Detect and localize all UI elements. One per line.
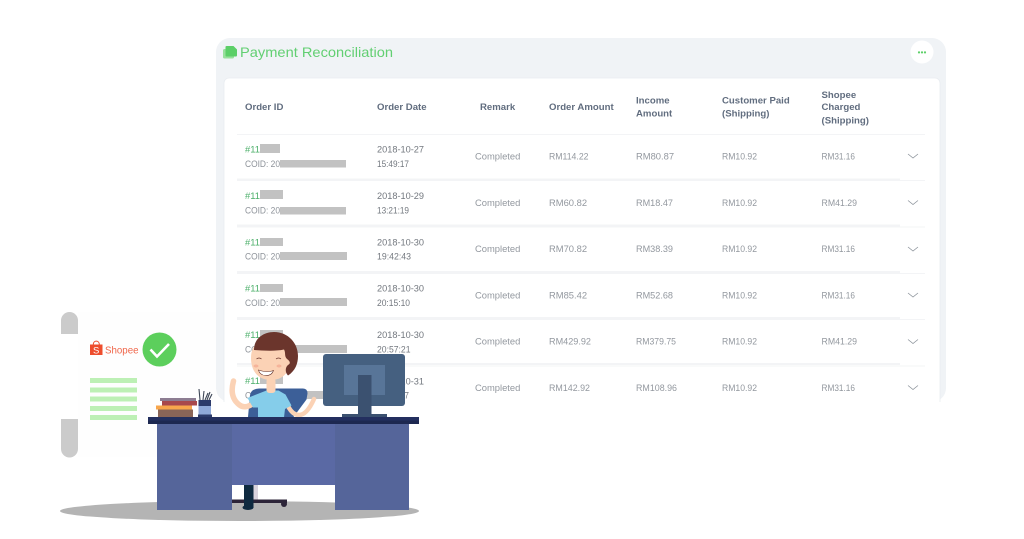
row: order 2018-10-30 20:15: Completed	[475, 290, 520, 300]
pen holder	[198, 389, 212, 417]
row: order 2018-10-27: Completed	[475, 150, 520, 162]
cheeks	[254, 364, 282, 368]
row: order 2018-10-30 20:57: RM429.92	[549, 336, 591, 346]
computer monitor	[323, 354, 405, 417]
office chair	[232, 388, 308, 510]
row: order 2018-10-27: 2018-10-27	[377, 144, 424, 154]
row: order 2018-10-30 20:15: RM10.92	[722, 290, 757, 300]
books stack	[156, 398, 197, 418]
row: order 2018-10-30 20:57: RM10.92	[722, 336, 757, 346]
row: order 2018-10-30 19:42: Completed	[475, 243, 520, 254]
row: order 2018-10-31: 21:00:07	[377, 390, 409, 400]
row: order 2018-10-30 20:57: 20:57:21	[377, 344, 410, 354]
torso	[248, 390, 292, 418]
table header row	[245, 90, 869, 126]
row: order 2018-10-30 19:42: 19:42:43	[377, 252, 411, 262]
row: order 2018-10-27: RM10.92	[722, 150, 757, 162]
row: order 2018-10-30 20:57: 2018-10-30	[377, 330, 424, 340]
table header row: Order Date	[377, 102, 427, 113]
row: order 2018-10-29: COID: 20	[245, 206, 280, 216]
table header row: Income	[636, 96, 670, 106]
row: order 2018-10-31: RM108.96	[636, 382, 677, 393]
row: order 2018-10-27: 15:49:17	[377, 159, 409, 169]
row: order 2018-10-30 20:15: RM85.42	[549, 290, 587, 300]
row: order 2018-10-30 20:57: #11	[245, 330, 260, 341]
row: order 2018-10-30 20:15: 2018-10-30	[377, 284, 424, 294]
left arm	[232, 381, 254, 407]
row: order 2018-10-30 20:15	[237, 271, 925, 308]
row: order 2018-10-29: RM18.47	[636, 197, 673, 208]
row: order 2018-10-30 20:15: #11	[245, 284, 260, 294]
row: order 2018-10-29: 2018-10-29	[377, 191, 424, 201]
icon: Shopee bag: S	[93, 346, 99, 356]
row: order 2018-10-29: #11	[245, 191, 260, 202]
row: order 2018-10-29: 13:21:19	[377, 206, 409, 216]
heading: Payment Reconciliation: Payment Reconciliation	[240, 44, 393, 60]
row: order 2018-10-31: COID: 20	[245, 390, 280, 400]
row: order 2018-10-27: COID: 20	[245, 159, 280, 169]
table header row: Customer Paid	[722, 96, 790, 106]
icon: more options button	[910, 40, 934, 64]
hair	[254, 332, 298, 376]
Shopee wordmark: Shopee	[105, 344, 139, 356]
table header row: Charged	[822, 102, 861, 113]
row: order 2018-10-30 19:42: 2018-10-30	[377, 238, 424, 248]
row: order 2018-10-27	[237, 134, 925, 169]
row: order 2018-10-30 20:15: RM52.68	[636, 290, 673, 300]
desk	[148, 417, 419, 510]
face	[251, 338, 290, 380]
row: order 2018-10-31: Completed	[475, 382, 520, 393]
row: order 2018-10-30 19:42: COID: 20	[245, 252, 280, 262]
row: order 2018-10-29	[237, 178, 925, 216]
row: order 2018-10-31	[237, 363, 925, 400]
row: order 2018-10-29: RM41.29	[822, 197, 857, 208]
person	[232, 332, 314, 418]
table header row: Order Amount	[549, 102, 614, 113]
row: order 2018-10-31: RM10.92	[722, 382, 757, 393]
row: order 2018-10-30 19:42: #11	[245, 238, 260, 248]
row: order 2018-10-31: #11	[245, 376, 260, 387]
table header row: Order ID	[245, 102, 283, 113]
icon: Shopee bag	[90, 341, 102, 356]
row: order 2018-10-30 19:42: RM70.82	[549, 243, 587, 254]
right arm	[288, 399, 314, 415]
row: order 2018-10-27: RM114.22	[549, 150, 588, 162]
row: order 2018-10-29: RM60.82	[549, 197, 587, 208]
neck	[266, 378, 276, 393]
table header row: (Shipping)	[822, 116, 869, 126]
eyes	[256, 358, 281, 359]
row: order 2018-10-30 20:15: 20:15:10	[377, 298, 410, 308]
row: order 2018-10-29: RM10.92	[722, 197, 757, 208]
row: order 2018-10-30 20:57: COID: 20	[245, 344, 280, 354]
row: order 2018-10-30 19:42: RM31.16	[822, 243, 855, 254]
table header row: Shopee	[822, 90, 856, 101]
row: order 2018-10-31: RM142.92	[549, 382, 590, 393]
row: order 2018-10-31: 2018-10-31	[377, 376, 424, 386]
receipt illustration	[61, 312, 216, 458]
panel: payment reconciliation dashboard	[210, 38, 955, 432]
row: order 2018-10-31: RM31.16	[822, 382, 855, 393]
receipt roller top	[61, 312, 78, 334]
row: order 2018-10-29: Completed	[475, 197, 520, 208]
row: order 2018-10-30 20:57: RM379.75	[636, 336, 676, 346]
table header row: Amount	[636, 108, 673, 120]
row: order 2018-10-30 20:57: RM41.29	[822, 336, 857, 346]
row: order 2018-10-30 20:15: RM31.16	[822, 290, 855, 300]
receipt lines	[90, 378, 137, 420]
row: order 2018-10-27: RM31.16	[822, 150, 855, 162]
icon: green check badge	[142, 332, 176, 366]
table header row: (Shipping)	[722, 108, 769, 120]
smile	[258, 370, 274, 376]
row: order 2018-10-30 20:57	[237, 317, 925, 354]
row: order 2018-10-30 19:42	[237, 224, 925, 262]
row: order 2018-10-30 19:42: RM38.39	[636, 243, 673, 254]
row: order 2018-10-27: #11	[245, 144, 260, 156]
row: order 2018-10-30 20:15: COID: 20	[245, 298, 280, 308]
row: order 2018-10-30 20:57: Completed	[475, 336, 520, 346]
receipt roller bottom	[61, 419, 78, 458]
row: order 2018-10-27: RM80.87	[636, 150, 674, 162]
table header row: Remark	[480, 102, 516, 113]
ground shadow	[60, 501, 419, 521]
row: order 2018-10-30 19:42: RM10.92	[722, 243, 757, 254]
icon: documents	[223, 46, 237, 58]
